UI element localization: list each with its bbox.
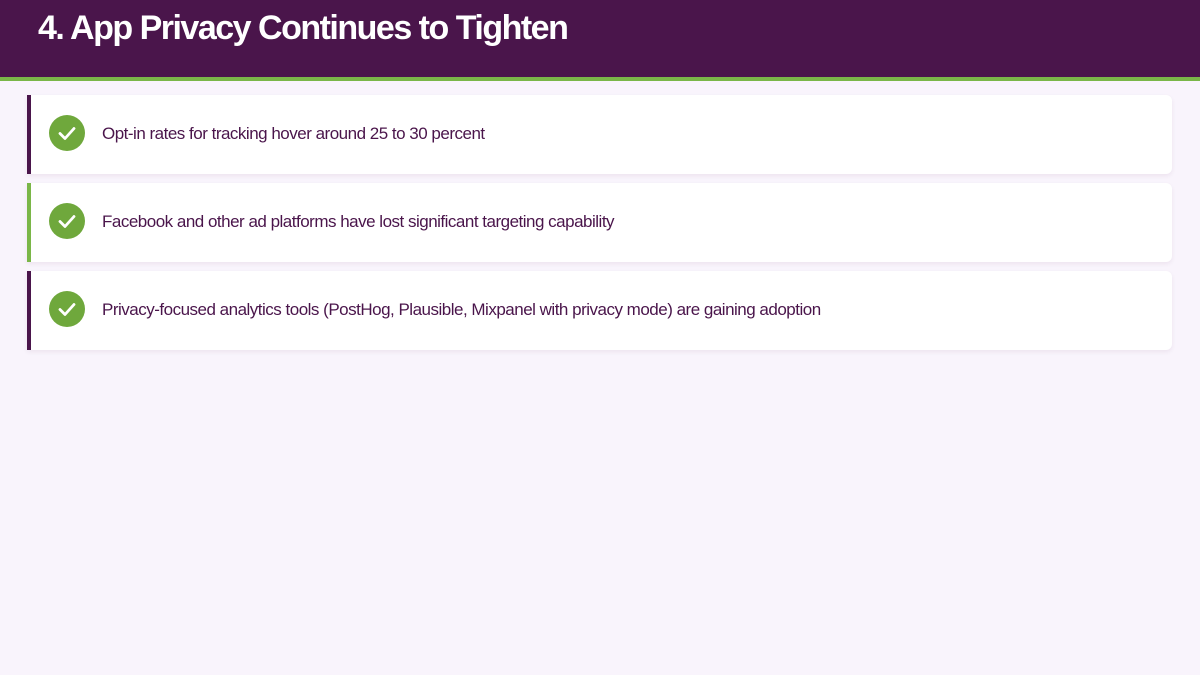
text: Opt-in rates for tracking hover around 25 to 30 percent bbox=[102, 124, 485, 143]
card: ad platforms bbox=[27, 183, 1172, 262]
header bbox=[0, 0, 1200, 81]
card: analytics tools bbox=[27, 271, 1172, 350]
text: Privacy-focused analytics tools (PostHog, Plausible, Mixpanel with privacy mode) are gaining adoption bbox=[102, 300, 821, 319]
text: Facebook and other ad platforms have lost significant targeting capability bbox=[102, 212, 614, 231]
title: 4. App Privacy Continues to Tighten bbox=[38, 9, 567, 47]
icon: check bbox=[49, 291, 85, 327]
card: opt-in rates bbox=[27, 95, 1172, 174]
icon: check bbox=[49, 203, 85, 239]
icon: check bbox=[49, 115, 85, 151]
